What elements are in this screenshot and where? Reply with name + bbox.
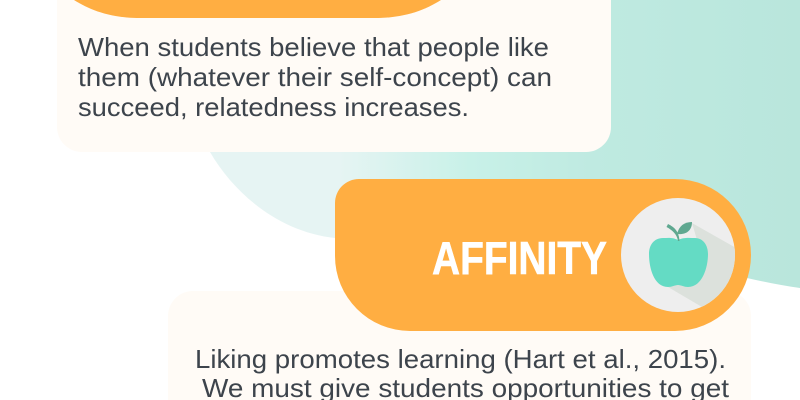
panel: relatedness text card <box>57 0 611 152</box>
body text: affinity: Liking promotes learning (Hart et al., 2015). <box>195 344 726 374</box>
background teal blob <box>180 0 800 288</box>
body text: affinity <box>195 344 730 400</box>
card background <box>57 0 611 152</box>
body text: relatedness: them (whatever their self-concept) can <box>78 62 552 92</box>
heading: AFFINITY: AFFINITY <box>432 232 607 284</box>
card background <box>168 291 751 400</box>
long shadow <box>668 223 735 307</box>
apple leaf <box>677 222 692 234</box>
body text: relatedness: When students believe that people like <box>78 32 549 62</box>
pill shape <box>335 179 751 331</box>
icon: apple <box>621 198 735 312</box>
body text: relatedness <box>78 32 552 122</box>
affinity heading pill <box>335 179 751 331</box>
panel: affinity text card <box>168 291 751 400</box>
icon circle <box>621 198 735 312</box>
apple stem <box>666 224 680 241</box>
orange heading pill bottom <box>74 0 441 18</box>
body text: relatedness: succeed, relatedness increases. <box>78 92 469 122</box>
apple body <box>649 238 708 287</box>
